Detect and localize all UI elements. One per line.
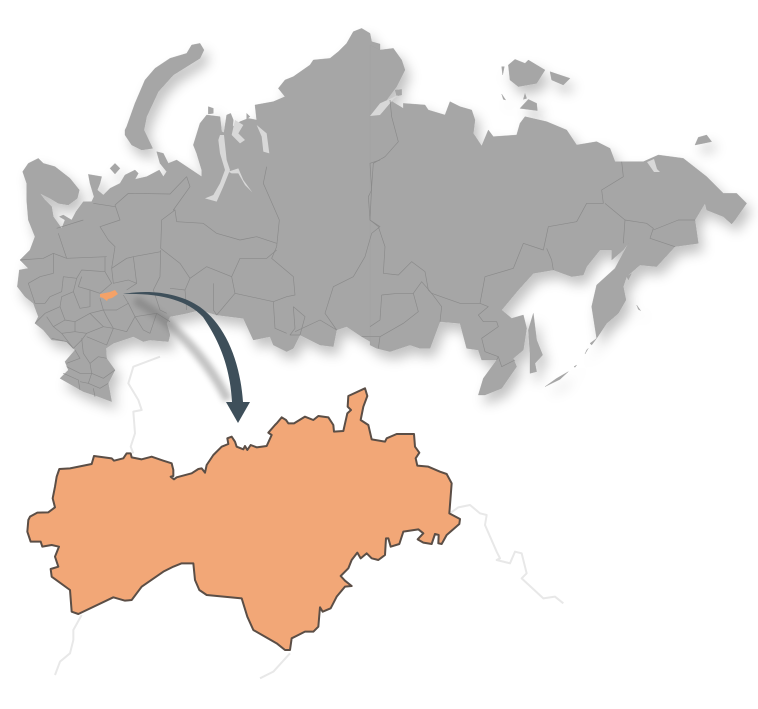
highlighted region on small map [100,290,118,301]
faint neighbouring borders behind enlarged region [55,357,563,678]
arrow shaft [123,292,243,402]
western part of the map [17,28,380,402]
arrow shadow [135,300,228,400]
regional borders, east [370,100,695,367]
Chaun bay inlet [647,159,660,172]
enlarged highlighted region [27,388,460,650]
curved arrow [123,292,250,423]
map of Russia [17,28,747,402]
gulfs and inlets [205,95,398,202]
eastern part of the map [370,45,747,395]
regional borders, west [20,160,380,397]
arrow head [226,402,250,423]
